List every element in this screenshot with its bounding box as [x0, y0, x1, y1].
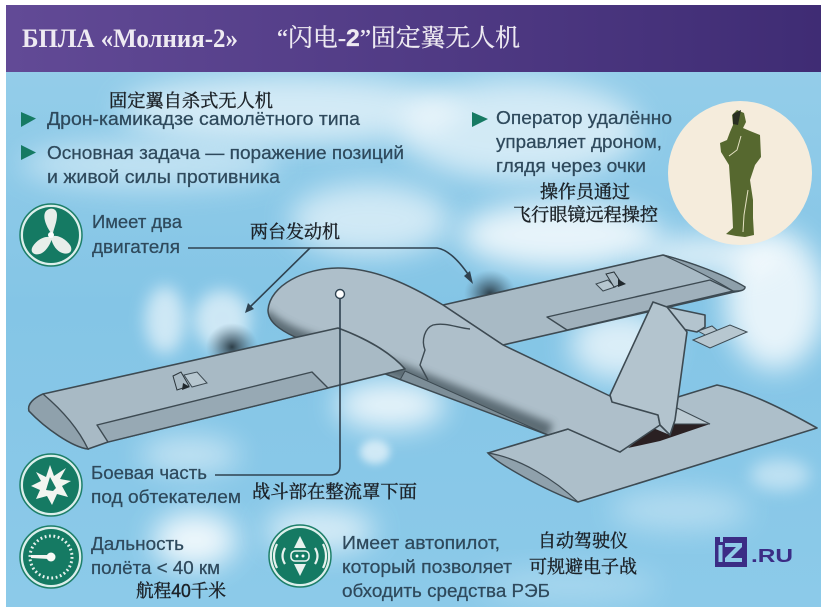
operator note: глядя через очки	[496, 155, 646, 176]
range text	[91, 533, 220, 578]
bullet arrow 2	[21, 145, 36, 160]
bullet list: top left	[21, 91, 404, 187]
icon: propeller	[20, 204, 82, 266]
logo: .RU	[751, 546, 793, 566]
goggles	[733, 110, 741, 125]
engines callout lines	[188, 248, 473, 313]
bullet text 2 line 2: и живой силы противника	[47, 166, 281, 187]
right wing flap	[547, 280, 733, 330]
range text: полёта < 40 км	[91, 557, 220, 578]
warhead text: под обтекателем	[91, 486, 241, 507]
autopilot chinese label: 可规避电子战	[529, 557, 637, 577]
engines feature	[20, 204, 340, 266]
operator text: Оператор удалённо	[496, 107, 672, 128]
rudder	[667, 307, 747, 348]
title chinese: “闪电-2”固定翼无人机	[277, 24, 520, 52]
left wing flap	[97, 372, 328, 442]
fin	[610, 302, 687, 435]
operator portrait circle	[668, 101, 812, 245]
rudder tab	[698, 326, 718, 336]
tailplane	[488, 385, 817, 502]
right wing servo	[596, 272, 626, 291]
range feature	[20, 526, 226, 601]
autopilot text: который позволяет	[342, 556, 513, 577]
bullet text 1: Дрон-камикадзе самолётного типа	[47, 108, 361, 129]
right wing	[443, 255, 745, 345]
operator chinese text: 操作员通过	[540, 182, 630, 202]
fuselage shading	[262, 315, 550, 439]
warhead feature	[20, 454, 417, 516]
fuselage bulge outline	[420, 324, 470, 380]
tail gap	[628, 424, 710, 448]
bullet arrow 1	[21, 112, 36, 127]
logo	[715, 537, 793, 567]
title russian: БПЛА «Молния-2»	[22, 24, 238, 53]
autopilot text: Имеет автопилот,	[342, 532, 500, 553]
warhead text	[91, 462, 241, 507]
operator note: управляет дроном,	[496, 131, 662, 152]
engines text: двигателя	[92, 236, 180, 257]
bullet arrow	[472, 112, 488, 127]
soldier silhouette	[720, 110, 761, 237]
operator note	[472, 107, 672, 225]
engine blur right	[464, 270, 516, 318]
icon: explosion	[20, 454, 82, 516]
soldier seams	[729, 136, 748, 232]
icon: dial gauge	[20, 526, 82, 588]
warhead text: Боевая часть	[91, 462, 207, 483]
airfoil lens	[488, 453, 578, 502]
arrow heads	[245, 303, 254, 313]
drone illustration	[29, 255, 817, 502]
engines text: Имеет два	[92, 211, 183, 232]
left wing	[29, 328, 405, 449]
warhead callout	[215, 290, 344, 475]
range text: Дальность	[91, 533, 184, 554]
autopilot text: обходить средства РЭБ	[342, 580, 550, 601]
icon: autopilot	[269, 525, 331, 587]
warhead chinese label: 战斗部在整流罩下面	[252, 482, 417, 502]
range chinese label: 航程40千米	[136, 581, 226, 601]
autopilot text	[342, 532, 550, 601]
header bar	[6, 5, 821, 72]
autopilot feature	[269, 525, 637, 601]
left wing servo	[173, 372, 207, 390]
autopilot chinese label	[529, 531, 637, 577]
bullet text 2: Основная задача — поражение позиций	[47, 142, 404, 163]
engines text	[92, 211, 183, 257]
engines chinese label: 两台发动机	[250, 222, 340, 242]
engine blur left	[206, 323, 258, 371]
chinese label: kamikaze drone: 固定翼自杀式无人机	[109, 91, 273, 111]
operator note: 飞行眼镜远程操控	[513, 205, 658, 225]
autopilot chinese label: 自动驾驶仪	[538, 531, 628, 551]
fuselage	[262, 268, 660, 452]
